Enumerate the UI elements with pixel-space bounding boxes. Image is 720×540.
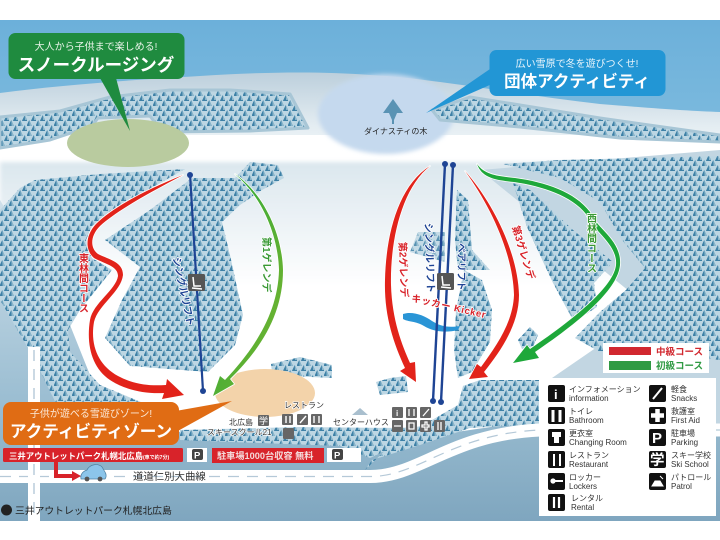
road label: 道道仁別大曲線 — [133, 470, 206, 483]
legend: lockers: Lockers — [569, 482, 597, 491]
lift: single left — [187, 172, 206, 394]
label: pair lift: ペアリフト — [455, 243, 466, 291]
legend: first aid: First Aid — [671, 416, 700, 425]
parking icon: P — [194, 450, 201, 462]
parking info sign — [212, 448, 324, 463]
legend: snacks: 軽食 — [671, 385, 687, 394]
forest: small clump — [410, 232, 445, 262]
legend: patrol — [649, 473, 711, 491]
parking icon — [187, 448, 207, 462]
center house: i — [396, 409, 398, 418]
lift: single and pair — [430, 161, 456, 405]
callout: activity zone: 子供が遊べる雪遊びゾーン! — [30, 407, 152, 420]
kicker jump — [403, 313, 460, 332]
sky — [0, 20, 720, 130]
forest: east outer — [0, 169, 185, 428]
parking icon: P — [334, 450, 341, 462]
label: second slope: 第2ゲレンデ — [396, 242, 411, 298]
right ground — [480, 150, 720, 521]
callout: group activity — [426, 50, 666, 113]
forest: south right — [365, 380, 540, 470]
legend: parking — [649, 428, 698, 447]
legend: lockers: ロッカー — [569, 473, 601, 482]
forest: east central — [105, 162, 284, 372]
callout: activity zone — [3, 401, 232, 445]
callout: activity zone: アクティビティゾーン — [10, 421, 172, 441]
legend: ski school: Ski School — [671, 460, 709, 469]
restaurant area — [207, 401, 324, 439]
dynasty tree — [364, 99, 427, 136]
slope shading — [0, 162, 720, 287]
label: first slope: 第1ゲレンデ — [260, 237, 273, 293]
forest band: north right — [432, 97, 720, 142]
restaurant area: 学 — [259, 415, 268, 426]
label: single lift center: シングルリフト — [422, 223, 437, 293]
parking icon — [327, 448, 361, 462]
legend: patrol: Patrol — [671, 482, 692, 491]
course color key: 初級コース — [656, 360, 703, 372]
legend: parking: 駐車場 — [671, 428, 695, 438]
legend: changing room: 更衣室 — [569, 428, 593, 438]
legend panel — [539, 378, 716, 516]
callout: group activity: 広い雪原で冬を遊びつくせ! — [516, 57, 638, 70]
activity zone — [215, 369, 315, 417]
ground below road — [0, 432, 720, 521]
forest: west big — [503, 156, 720, 360]
road: vertical — [28, 347, 40, 521]
legend: ski school: 学 — [650, 451, 664, 469]
forest: center — [454, 270, 492, 378]
legend: patrol: パトロール — [671, 473, 711, 482]
legend: first aid — [649, 406, 700, 425]
legend: changing room — [548, 428, 627, 447]
legend: lockers — [548, 473, 601, 491]
road: horizontal — [0, 430, 720, 476]
run: east course — [87, 175, 184, 399]
forest band: north left — [0, 90, 308, 148]
callout: snow cruising: 大人から子供まで楽しめる! — [35, 40, 157, 53]
restaurant area: スキースクール21 — [207, 428, 272, 437]
outlet location: 三井アウトレットパーク札幌北広島 — [15, 504, 172, 517]
label: kicker: キッカー Kicker — [410, 293, 487, 321]
legend: bathroom — [548, 407, 604, 425]
legend: rental: Rental — [571, 503, 594, 512]
legend: first aid: 救護室 — [671, 406, 695, 416]
parking info sign: 駐車場1000台収容 無料 — [217, 450, 314, 461]
car icon — [81, 465, 106, 481]
lift icon — [188, 274, 205, 291]
legend: information: information — [569, 394, 609, 403]
course color key — [603, 343, 709, 373]
legend: information: インフォメーション — [569, 385, 641, 394]
dynasty tree label: ダイナスティの木 — [364, 126, 427, 136]
legend: ski school — [649, 450, 711, 469]
lower left ground — [0, 200, 540, 521]
forest: west upper small — [513, 183, 613, 322]
snow cruising zone — [67, 119, 189, 167]
far snow ridge — [0, 72, 720, 180]
label: third slope: 第3ゲレンデ — [509, 224, 538, 281]
run: west course — [477, 164, 620, 363]
outlet sign — [3, 448, 183, 462]
legend: restaurant: Restaurant — [569, 460, 609, 469]
snow field — [0, 135, 720, 430]
forest: between lifts — [455, 190, 490, 270]
legend: parking: Parking — [671, 438, 698, 447]
callout: snow cruising: スノークルージング — [18, 55, 175, 75]
center house: センターハウス — [333, 418, 389, 427]
legend: restaurant — [548, 451, 609, 469]
forest: roadside strip — [180, 425, 440, 458]
legend: bathroom: Bathroom — [569, 416, 604, 425]
outlet sign: 三井アウトレットパーク札幌北広島(車で約7分) — [9, 451, 169, 461]
label: east course: 東林間コース — [76, 252, 88, 313]
lift icon — [437, 273, 454, 290]
legend: bathroom: トイレ — [569, 407, 593, 416]
restaurant area: レストラン — [284, 401, 324, 410]
legend: changing room: Changing Room — [569, 438, 627, 447]
forest: small clumps — [271, 327, 538, 395]
run: second slope — [385, 166, 430, 382]
callout: snow cruising — [8, 33, 184, 131]
legend: rental — [548, 494, 603, 512]
legend: ski school: スキー学校 — [671, 450, 711, 460]
legend: information: i — [554, 387, 558, 402]
legend: snacks: Snacks — [671, 394, 697, 403]
callout: group activity: 団体アクティビティ — [504, 71, 650, 91]
course color key: 中級コース — [656, 346, 703, 358]
direction arrow — [54, 462, 81, 481]
label: single lift left: シングルリフト — [170, 256, 197, 327]
run: third slope — [465, 171, 519, 379]
label: west course: 西林間コース — [584, 213, 596, 273]
center house — [333, 407, 445, 432]
restaurant area: 北広島 — [229, 417, 253, 427]
legend: parking: P — [652, 430, 662, 447]
legend: information — [548, 385, 641, 403]
legend: snacks — [649, 385, 697, 403]
legend: restaurant: レストラン — [569, 451, 609, 460]
run: first slope — [213, 174, 283, 396]
dynasty tree clearing — [318, 74, 454, 154]
legend: rental: レンタル — [571, 494, 603, 503]
